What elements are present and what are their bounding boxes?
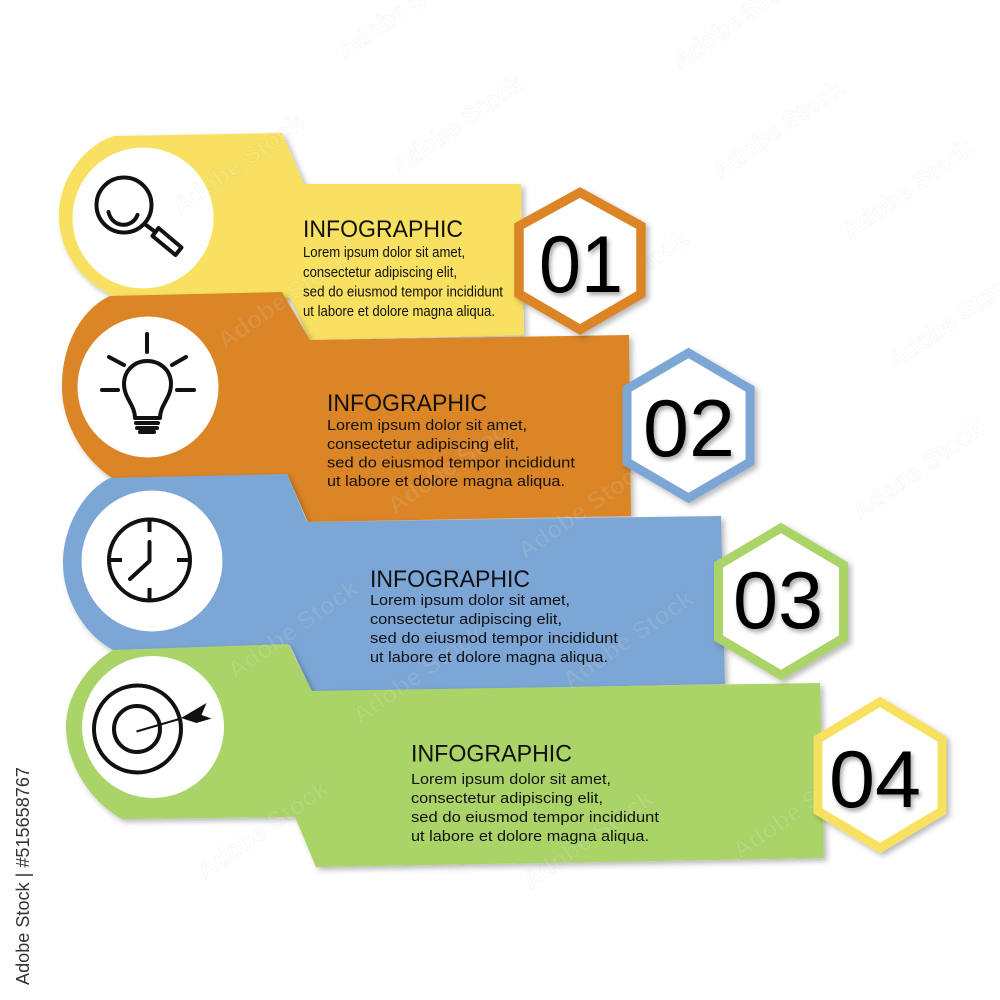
watermarks: Adobe Stock bbox=[382, 409, 524, 520]
text block 3: INFOGRAPHIC bbox=[370, 566, 530, 593]
text block 1: consectetur adipiscing elit, bbox=[303, 265, 457, 281]
text block 2: sed do eiusmod tempor incididunt bbox=[327, 454, 576, 472]
text block 4: ut labore et dolore magna aliqua. bbox=[411, 828, 649, 845]
icon: target with arrow bbox=[94, 686, 212, 772]
text block 4: sed do eiusmod tempor incididunt bbox=[411, 809, 660, 826]
badge 01: 01 bbox=[539, 220, 623, 310]
watermarks: Adobe Stock bbox=[557, 584, 699, 695]
badge 03 bbox=[718, 528, 844, 675]
badge 04: 04 bbox=[829, 735, 921, 825]
text block 4: Lorem ipsum dolor sit amet, bbox=[411, 771, 611, 788]
watermarks: Adobe Stock bbox=[167, 109, 309, 220]
watermarks: Adobe Stock bbox=[847, 414, 989, 525]
watermarks: Adobe Stock bbox=[212, 244, 354, 355]
text block 2 bbox=[327, 390, 576, 490]
watermarks: Adobe Stock bbox=[192, 774, 334, 885]
watermarks: Adobe Stock bbox=[512, 454, 654, 565]
badge 03: 03 bbox=[733, 556, 823, 646]
badge 02: 02 bbox=[643, 384, 735, 474]
text block 4: consectetur adipiscing elit, bbox=[411, 790, 603, 807]
panel 2: orange banner bbox=[62, 292, 631, 522]
stock id text: Adobe Stock | #515658767 bbox=[13, 767, 33, 985]
watermarks: Adobe Stock bbox=[837, 134, 979, 245]
text block 3: ut labore et dolore magna aliqua. bbox=[370, 649, 608, 666]
badge 04 bbox=[818, 702, 942, 848]
text block 1: INFOGRAPHIC bbox=[303, 216, 463, 243]
text block 2: INFOGRAPHIC bbox=[327, 390, 487, 417]
text block 2: consectetur adipiscing elit, bbox=[327, 436, 519, 453]
text block 1: Lorem ipsum dolor sit amet, bbox=[303, 245, 465, 261]
text block 3: consectetur adipiscing elit, bbox=[370, 611, 562, 628]
watermarks: Adobe Stock bbox=[222, 574, 364, 685]
text block 3 bbox=[370, 566, 619, 666]
badge 01 bbox=[519, 192, 641, 330]
text block 2: Lorem ipsum dolor sit amet, bbox=[327, 417, 527, 434]
watermarks bbox=[167, 0, 1000, 895]
icon: magnifying glass bbox=[96, 178, 182, 255]
icon: light bulb bbox=[102, 334, 194, 432]
text block 4 bbox=[411, 740, 660, 845]
panel 3: blue banner bbox=[63, 474, 725, 692]
text block 4: INFOGRAPHIC bbox=[411, 740, 572, 768]
badge 02 bbox=[627, 353, 750, 498]
icon: clock bbox=[109, 520, 190, 600]
text block 3: sed do eiusmod tempor incididunt bbox=[370, 630, 619, 647]
panel 1: yellow banner bbox=[59, 133, 524, 340]
text block 1: ut labore et dolore magna aliqua. bbox=[303, 304, 495, 320]
watermarks: Adobe Stock bbox=[347, 619, 489, 730]
watermarks: Adobe Stock bbox=[387, 69, 529, 180]
panel 4: green banner bbox=[66, 644, 824, 867]
text block 1: sed do eiusmod tempor incididunt bbox=[303, 284, 503, 300]
watermarks: Adobe Stock bbox=[727, 754, 869, 865]
watermarks: Adobe Stock bbox=[517, 784, 659, 895]
text block 2: ut labore et dolore magna aliqua. bbox=[327, 473, 565, 490]
text block 3: Lorem ipsum dolor sit amet, bbox=[370, 592, 570, 609]
watermarks: Adobe Stock bbox=[707, 74, 849, 185]
text block 1 bbox=[303, 216, 503, 320]
watermarks: Adobe Stock bbox=[552, 224, 694, 335]
